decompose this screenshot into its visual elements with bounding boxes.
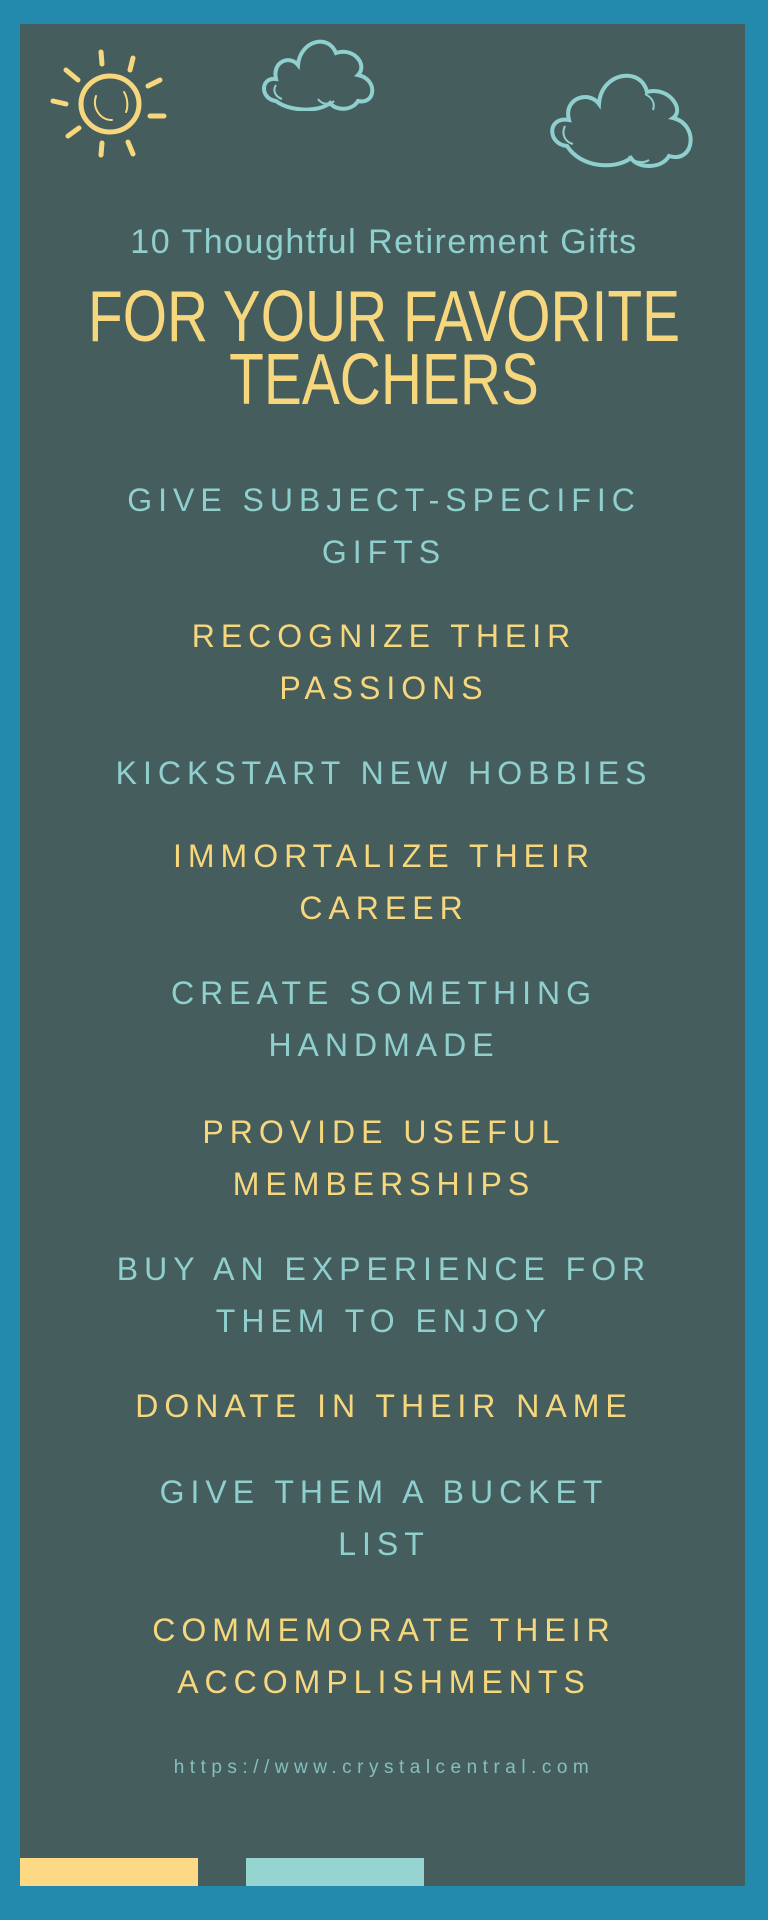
- title: [88, 277, 680, 420]
- item 1: GIFTS: [322, 534, 446, 570]
- title: TEACHERS: [229, 340, 539, 420]
- item 8: DONATE IN THEIR NAME: [135, 1388, 633, 1424]
- item 9: GIVE THEM A BUCKET: [160, 1474, 608, 1510]
- icon: cloud small: [262, 40, 374, 111]
- item 6: [202, 1114, 566, 1202]
- item 5: HANDMADE: [268, 1027, 500, 1063]
- item 1: [127, 482, 641, 570]
- item 5: CREATE SOMETHING: [171, 975, 597, 1011]
- item 5: [171, 975, 597, 1063]
- item 6: PROVIDE USEFUL: [202, 1114, 566, 1150]
- item 2: PASSIONS: [279, 670, 489, 706]
- icon: cloud large: [550, 74, 693, 168]
- item 4: CAREER: [299, 890, 469, 926]
- item 4: [173, 838, 595, 926]
- item 6: MEMBERSHIPS: [233, 1166, 535, 1202]
- item 7: BUY AN EXPERIENCE FOR: [117, 1251, 651, 1287]
- list of gifts: [116, 482, 652, 1700]
- item 9: [160, 1474, 608, 1562]
- item 10: COMMEMORATE THEIR: [152, 1612, 616, 1648]
- item 2: RECOGNIZE THEIR: [192, 618, 576, 654]
- item 7: THEM TO ENJOY: [216, 1303, 552, 1339]
- item 7: [117, 1251, 651, 1339]
- item 9: LIST: [338, 1526, 430, 1562]
- url: https://www.crystalcentral.com: [174, 1757, 594, 1778]
- item 3: KICKSTART NEW HOBBIES: [116, 755, 652, 791]
- subtitle: 10 Thoughtful Retirement Gifts: [130, 223, 638, 261]
- bar: teal: [246, 1858, 424, 1886]
- item 1: GIVE SUBJECT-SPECIFIC: [127, 482, 641, 518]
- item 10: ACCOMPLISHMENTS: [177, 1664, 591, 1700]
- title: FOR YOUR FAVORITE: [88, 277, 680, 357]
- item 10: [152, 1612, 616, 1700]
- bar: yellow: [20, 1858, 198, 1886]
- item 4: IMMORTALIZE THEIR: [173, 838, 595, 874]
- icon: sun: [50, 50, 166, 158]
- item 2: [192, 618, 576, 706]
